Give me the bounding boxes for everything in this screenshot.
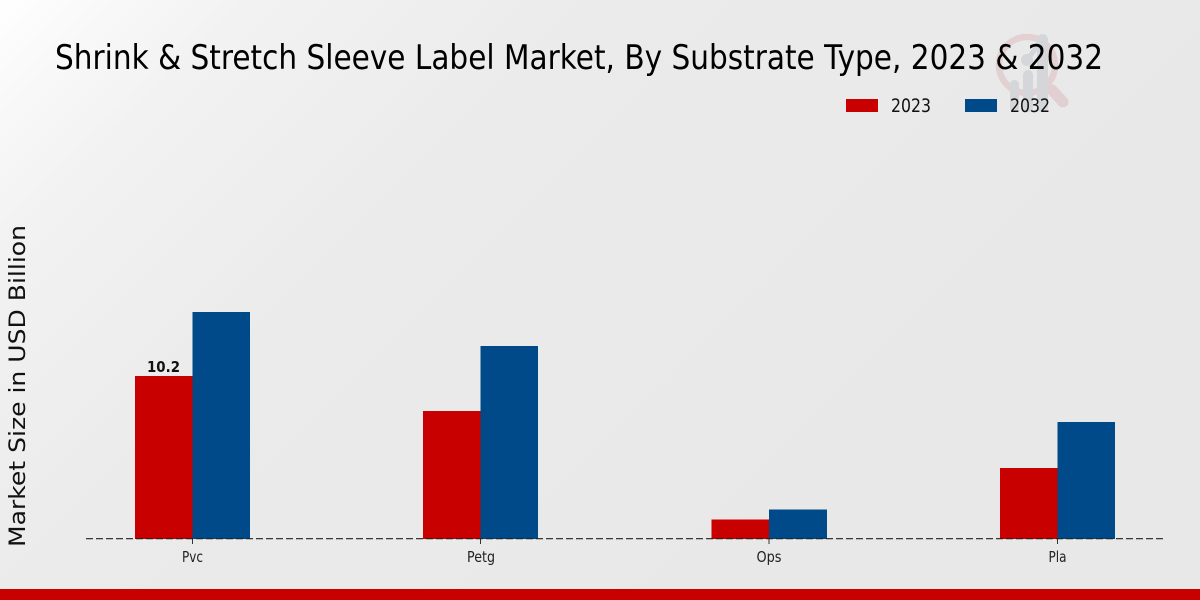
x-axis labels: Ops	[756, 548, 782, 566]
x-axis labels	[182, 539, 1066, 566]
legend: 2023	[846, 95, 931, 117]
x-axis labels: Pvc	[182, 548, 203, 566]
icon: watermark logo	[999, 34, 1063, 112]
group: Pvc	[135, 312, 250, 539]
legend: 2023: 2023	[891, 95, 931, 117]
x-axis labels: Petg	[467, 548, 495, 566]
legend: 2032	[965, 95, 1050, 117]
bar chart	[135, 312, 1115, 539]
x axis line	[86, 538, 1164, 540]
group: Petg	[423, 346, 538, 539]
legend	[846, 95, 1050, 117]
value label: 10.2	[147, 358, 180, 376]
x-axis labels: Pla	[1048, 548, 1066, 566]
legend: 2032: 2032	[1010, 95, 1050, 117]
group: Pla	[1000, 422, 1115, 539]
group: Ops	[712, 510, 827, 539]
footer bar	[0, 589, 1200, 600]
y-axis title: Market Size in USD Billion	[6, 225, 31, 547]
